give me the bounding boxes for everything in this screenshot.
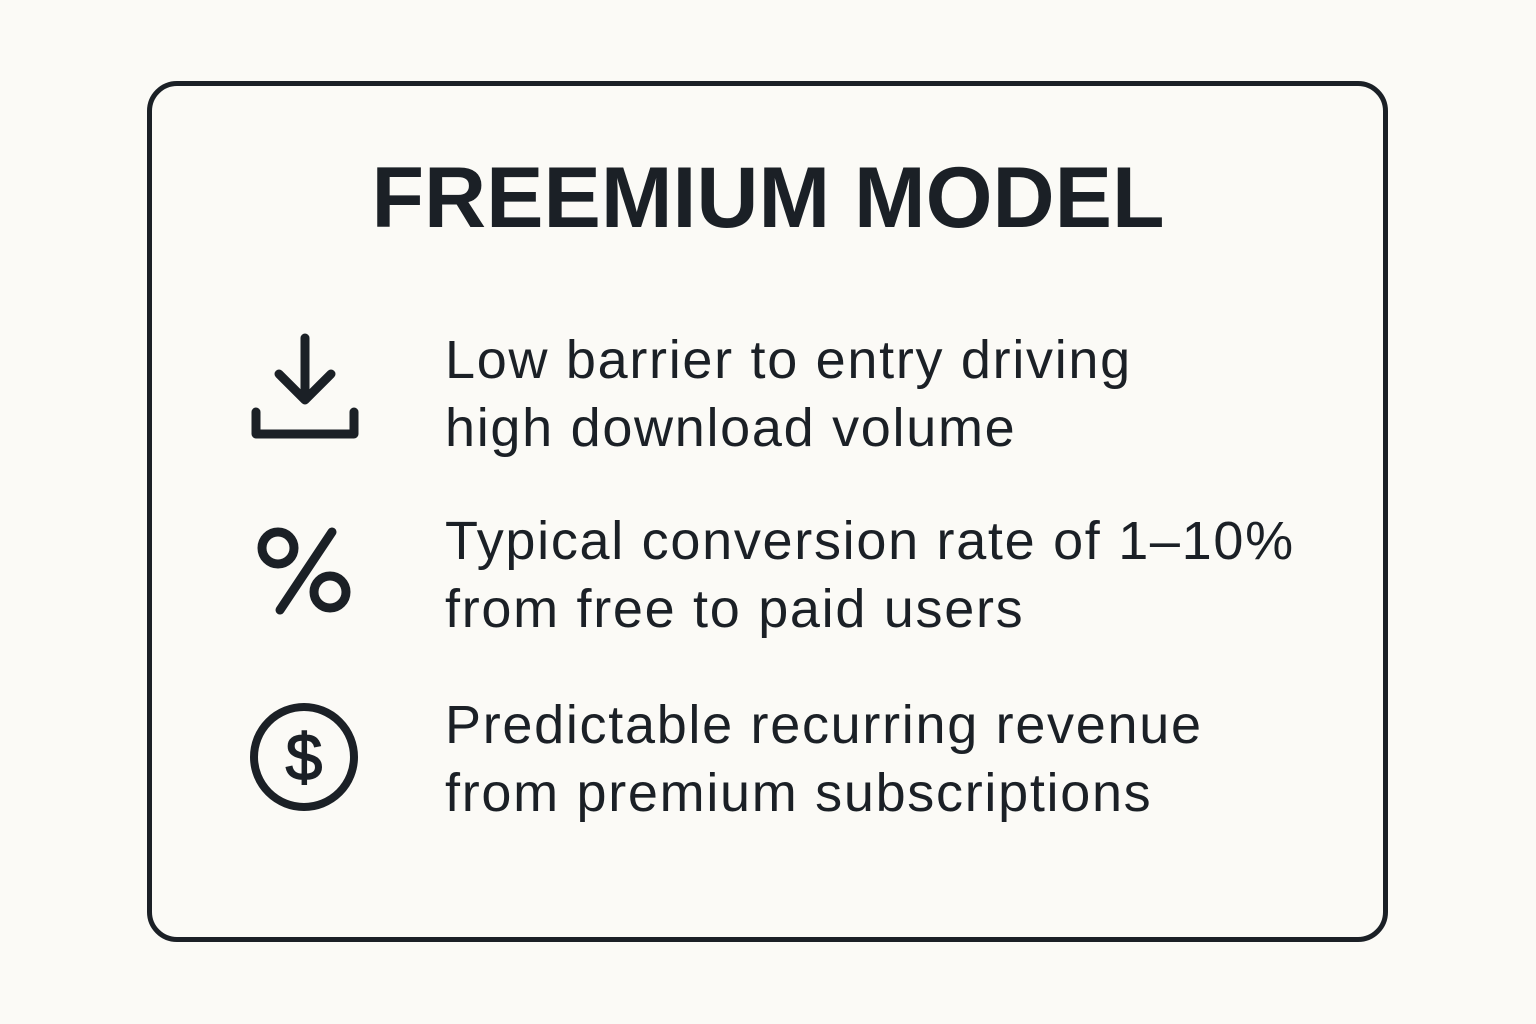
text: conversion: [445, 511, 1295, 639]
text: low barrier: high download volume: [445, 398, 1016, 458]
text: conversion: from free to paid users: [445, 579, 1024, 639]
text: low barrier: [445, 330, 1132, 458]
text: revenue: Predictable recurring revenue: [445, 695, 1203, 755]
panel: freemium box: [147, 81, 1388, 942]
text: revenue: from premium subscriptions: [445, 763, 1152, 823]
text: revenue: [445, 695, 1203, 823]
title: FREEMIUM MODEL: [371, 150, 1165, 246]
icon: percent: [258, 528, 350, 614]
icon: dollar: $: [286, 720, 322, 794]
icon: dollar: [250, 703, 358, 811]
text: low barrier: Low barrier to entry driving: [445, 330, 1132, 390]
text: conversion: Typical conversion rate of 1–10%: [445, 511, 1295, 571]
icon: download: [252, 334, 358, 438]
